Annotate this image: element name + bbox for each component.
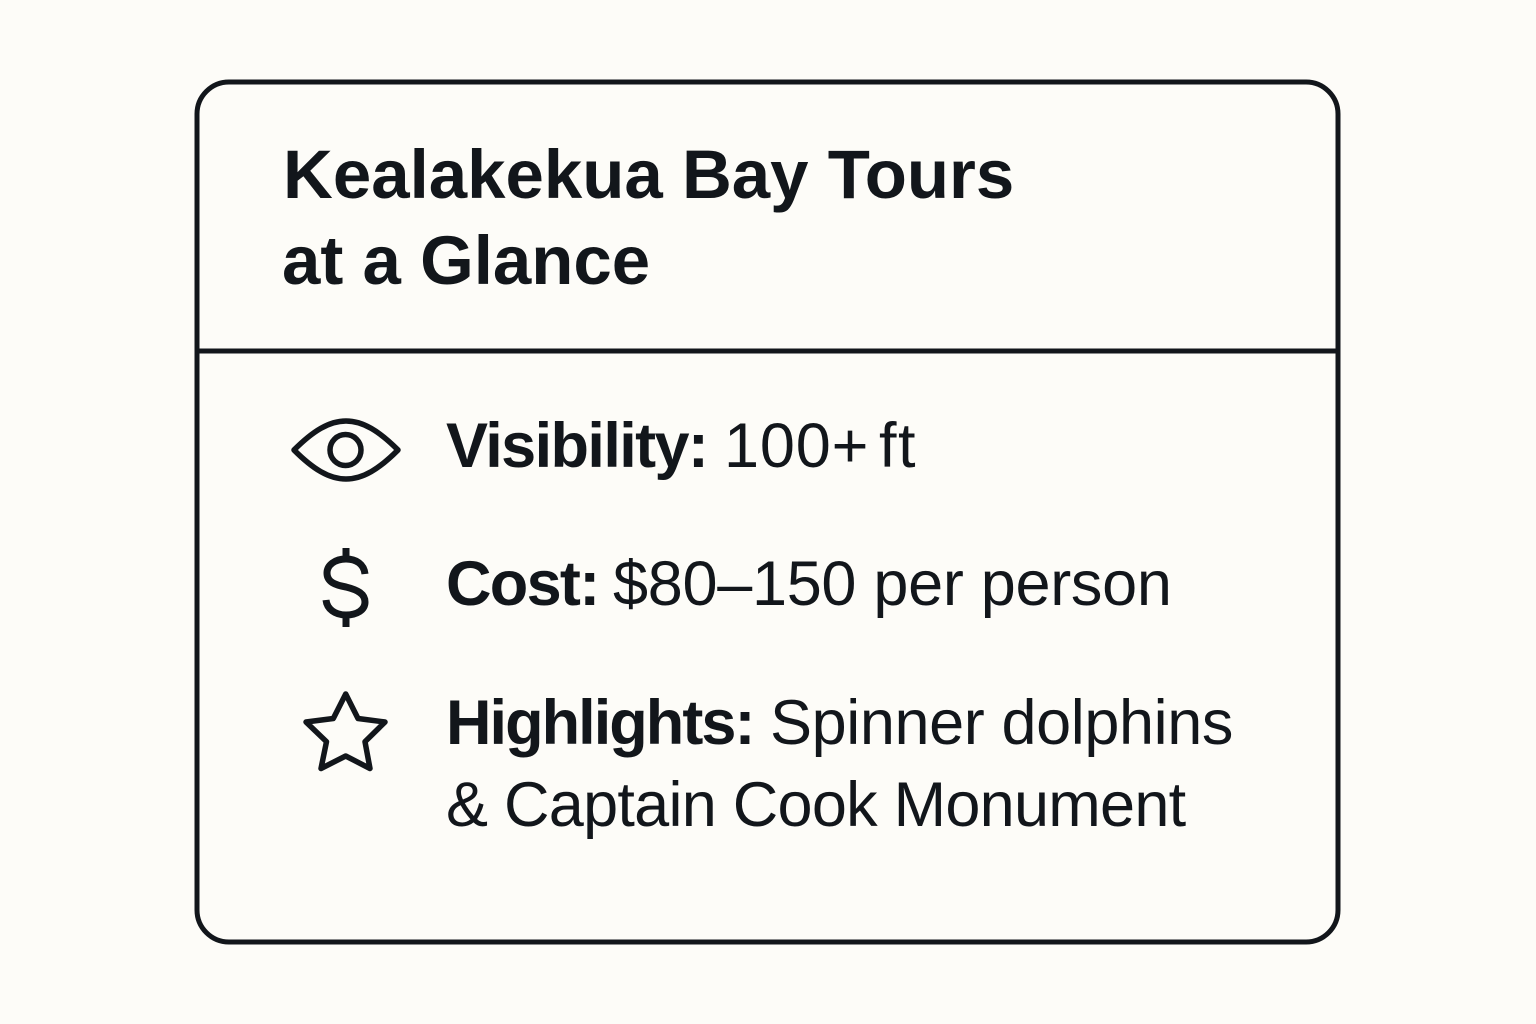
title [282,136,1014,299]
highlights row: Highlights: [446,688,754,758]
title: at a Glance [282,222,650,299]
cost row: Cost: [446,549,598,619]
title: Kealakekua Bay Tours [283,136,1014,213]
visibility row: ft [879,411,917,481]
highlights row: Spinner dolphins [770,688,1233,758]
visibility row: 100+ [724,411,869,481]
visibility row [446,411,917,481]
cost row: $80–150 per person [613,549,1172,619]
icon: dollar sign [322,548,368,627]
highlights row [446,688,1233,840]
visibility row: Visibility: [446,411,707,481]
icon: eye [291,418,401,482]
highlights row: & Captain Cook Monument [446,770,1185,840]
icon: star [303,691,388,772]
